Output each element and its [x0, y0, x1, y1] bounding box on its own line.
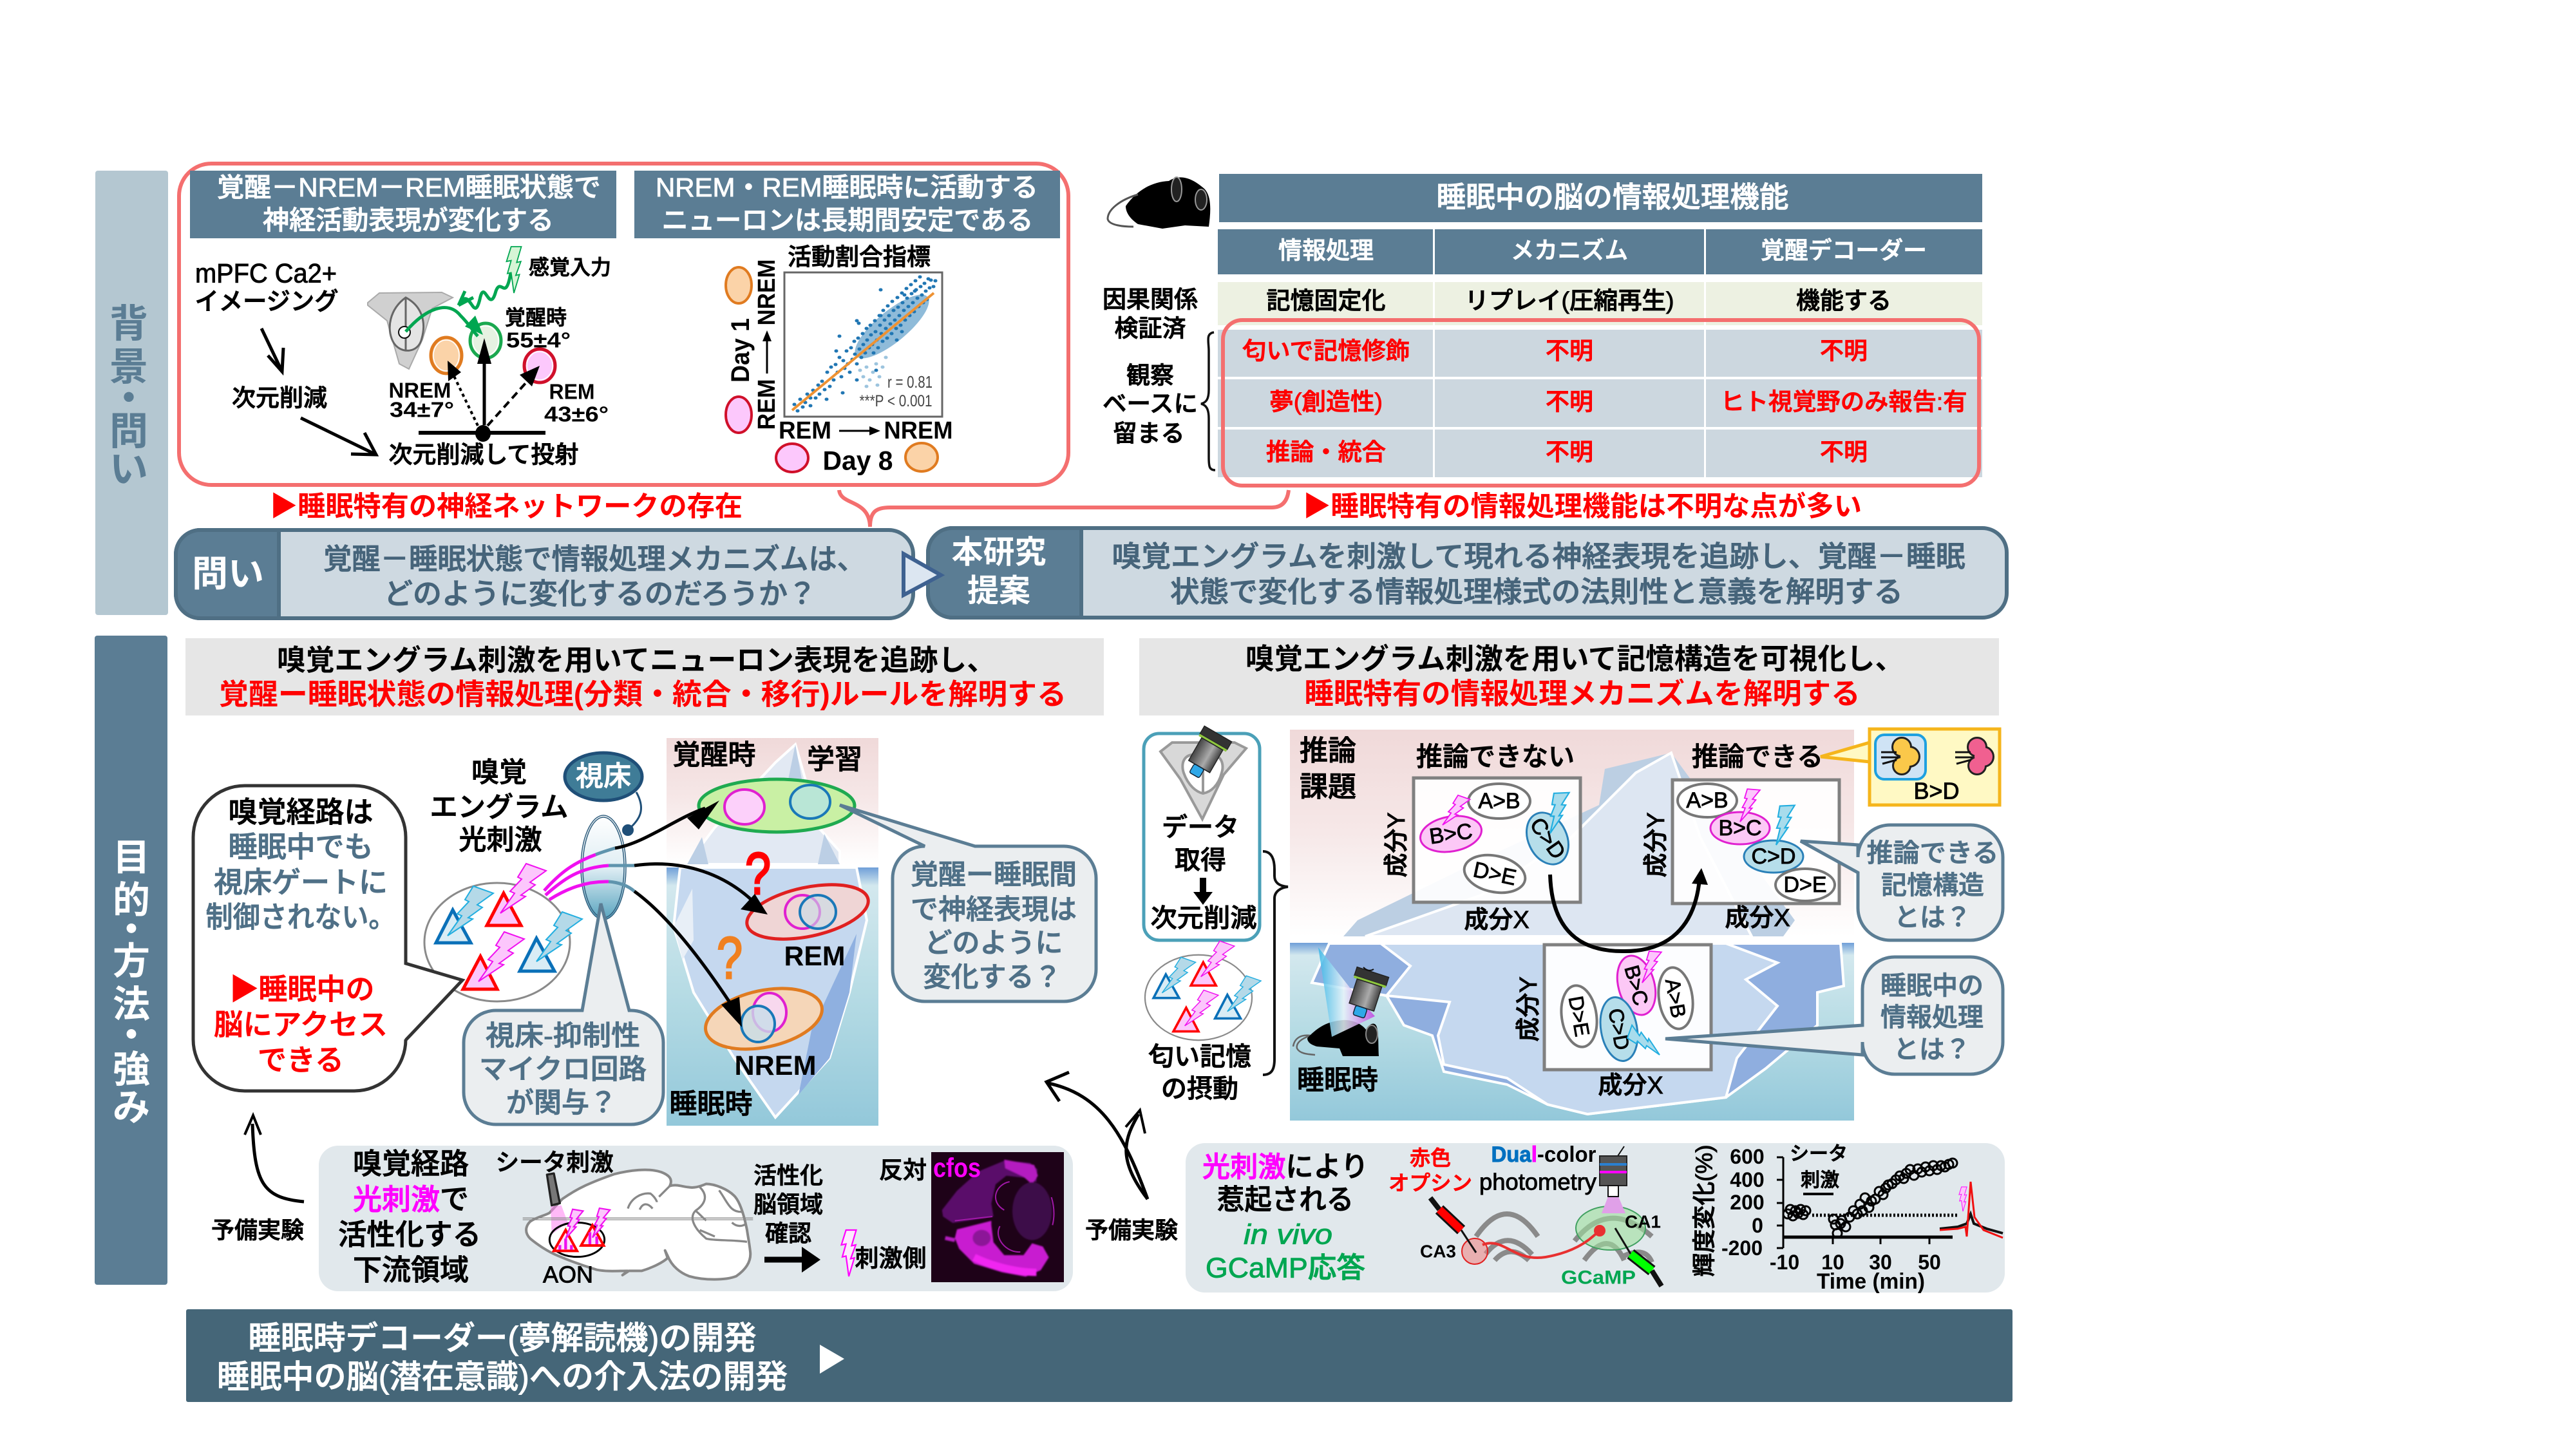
callout: olfactory path not gated: ▶睡眠中の: [229, 972, 375, 1006]
panel: section label purpose: ・: [113, 1015, 150, 1056]
panel: section label purpose: み: [113, 1087, 150, 1128]
table: sleep information processing: 覚醒デコーダー: [1761, 237, 1927, 264]
icon: thalamic gate lens: [581, 815, 626, 920]
icon: engram neurons: [424, 864, 582, 1001]
chart: brightness change over time: Time (min): [1817, 1269, 1925, 1294]
table: sleep information processing: 夢(創造性): [1269, 389, 1383, 415]
callout: olfactory path not gated: 脳にアクセス: [214, 1009, 388, 1041]
callout: sleep processing: 睡眠中の: [1880, 972, 1984, 1000]
arrow: pre-experiment to callout: [245, 1115, 304, 1202]
labels: state angles: NREM: [389, 379, 451, 402]
heading: state dependent representation: 神経活動表現が変化する: [263, 205, 554, 235]
table: sleep information processing: 不明: [1546, 389, 1593, 415]
table: sleep information processing: 機能する: [1796, 287, 1891, 314]
text block: imaging flow: [194, 258, 578, 468]
labels: iceberg states: [670, 740, 862, 1120]
text block: GCaMP response: [1202, 1151, 1368, 1284]
callout: olfactory path not gated: 睡眠中でも: [228, 831, 374, 863]
chart: memory map can infer: 成分Y: [1643, 812, 1670, 878]
chart: memory map cannot infer: A>B: [1478, 789, 1520, 813]
panel: question: 覚醒－睡眠状態で情報処理メカニズムは、: [323, 542, 866, 576]
chart: activity ratio index scatter: [784, 243, 942, 417]
callout: thalamic inhibitory microcircuit: [464, 904, 663, 1124]
chart: memory map cannot infer: B>C: [1428, 819, 1474, 849]
labels: state angles: 55±4°: [506, 328, 571, 352]
label: odor memory perturbation: 匂い記憶: [1148, 1043, 1251, 1071]
panel: proposal: [928, 528, 2007, 618]
chart: brightness change over time: 輝度変化(%): [1691, 1145, 1717, 1276]
labels: inference task: 推論: [1300, 735, 1356, 766]
labels: brain experiment: 反対: [879, 1157, 927, 1184]
icon: side view brain with fiber: [523, 1170, 753, 1280]
callout: representation change between states: で神経表現は: [911, 895, 1077, 925]
chart: brightness change over time: -10: [1770, 1251, 1799, 1274]
chart: brightness change over time: 600: [1730, 1145, 1765, 1168]
diagram: NREM cluster: [700, 979, 828, 1059]
callout: representation change between states: [840, 805, 1096, 1001]
heading: state dependent representation: 覚醒－NREM－REM睡眠状態で: [217, 173, 601, 202]
table: sleep information processing: [1218, 174, 1982, 477]
chart: memory map can infer: C>D: [1752, 844, 1795, 869]
arrow: sleep replay curved: [1550, 868, 1708, 951]
text block: downstream areas: 活性化する: [338, 1218, 481, 1251]
diagram: dual color photometry: [1388, 1142, 1662, 1288]
table: sleep information processing: 不明: [1546, 439, 1593, 465]
chart: memory map during sleep: 成分X: [1598, 1072, 1663, 1099]
callout: sleep processing: とは？: [1893, 1036, 1971, 1064]
panel: section label background: ・: [109, 377, 148, 420]
labels: state angles: [389, 256, 611, 426]
icon: yellow odor key: [1821, 729, 2000, 805]
labels: iceberg states: 睡眠時: [670, 1089, 752, 1120]
axis: day 8: [776, 417, 953, 475]
axis: day 8: REM: [779, 417, 831, 444]
panel: section label purpose: 法: [113, 984, 150, 1025]
label: sleeping: 睡眠時: [1297, 1065, 1378, 1095]
icon: odor memory neurons: [1145, 941, 1261, 1040]
callout: memory structure: とは？: [1894, 904, 1971, 932]
icon: mouse: [1108, 177, 1210, 229]
label: preliminary experiment left: 予備実験: [211, 1217, 304, 1243]
heading: stable neurons: NREM・REM睡眠時に活動する: [656, 173, 1038, 202]
labels: brain experiment: 確認: [765, 1220, 811, 1247]
label: odor memory perturbation: [1148, 1043, 1251, 1103]
panel: question: [176, 530, 913, 618]
chart: memory map can infer: [1643, 780, 1839, 932]
chart: memory map during sleep: B>C: [1620, 963, 1653, 1008]
text block: optical stimulation: エングラム: [430, 792, 568, 823]
bracket: link findings to question: [839, 490, 1289, 527]
callout: sleep processing: 情報処理: [1880, 1003, 1984, 1032]
icon: mouse brain top view: [368, 292, 453, 369]
labels: brain experiment: AON: [543, 1261, 593, 1288]
panel: neural representation findings: [179, 164, 1068, 485]
panel: right iceberg sleep bottom: [1290, 943, 1854, 1121]
callout: thalamic inhibitory microcircuit: マイクロ回路: [479, 1054, 647, 1085]
diagram: dual color photometry: photometry: [1479, 1168, 1596, 1195]
table: sleep information processing: ヒト視覚野のみ報告:有: [1721, 389, 1967, 415]
panel: proposal: 状態で変化する情報処理様式の法則性と意義を解明する: [1170, 576, 1903, 608]
banner: future development: 睡眠時デコーダー(夢解読機)の開発: [249, 1320, 756, 1356]
chart: brightness change over time: 30: [1869, 1251, 1892, 1274]
chart: memory map cannot infer: 成分X: [1464, 907, 1530, 934]
panel: question: どのように変化するのだろうか？: [384, 577, 817, 611]
labels: iceberg states: 覚醒時: [672, 740, 756, 771]
labels: state angles: 34±7°: [390, 398, 454, 421]
chart: activity ratio index scatter: r = 0.81: [887, 372, 933, 392]
callout: thalamic inhibitory microcircuit: 視床-抑制性: [486, 1021, 640, 1052]
chart: memory map during sleep: A>B: [1661, 977, 1690, 1019]
chart: brightness change over time: 50: [1918, 1251, 1941, 1274]
icon: stimulation bolt: [841, 1230, 857, 1276]
heading: left aim: 嗅覚エングラム刺激を用いてニューロン表現を追跡し、: [277, 644, 996, 676]
row labels: verified and observed: [1103, 286, 1215, 470]
table: sleep information processing: 推論・統合: [1266, 439, 1386, 465]
chart: activity ratio index scatter: 活動割合指標: [788, 243, 931, 270]
table: sleep information processing: 不明: [1546, 337, 1593, 365]
labels: inference task: 推論できる: [1692, 742, 1823, 772]
heading: right aim: [1139, 638, 1999, 715]
panel: section label purpose: 目: [113, 837, 150, 878]
table: sleep information processing: リプレイ(圧縮再生): [1464, 287, 1674, 314]
panel: section label purpose: 的: [113, 880, 150, 921]
chart: memory map can infer: A>B: [1686, 788, 1728, 813]
panel: proposal: 本研究: [951, 535, 1046, 570]
arrows: projections through thalamus: [544, 800, 768, 1027]
panel: section label purpose: [95, 636, 167, 1285]
chart: memory map cannot infer: 成分Y: [1383, 812, 1410, 878]
labels: brain experiment: 刺激側: [855, 1245, 926, 1271]
axis: day 1: REM: [753, 379, 781, 430]
heading: stable neurons: ニューロンは長期間安定である: [662, 205, 1033, 235]
callout: thalamic inhibitory microcircuit: が関与？: [506, 1088, 617, 1119]
axis: day 1: [726, 259, 781, 433]
axis: day 8: Day 8: [823, 446, 893, 475]
labels: iceberg states: REM: [784, 941, 845, 972]
image: cfos brain section: [931, 1152, 1064, 1282]
labels: brain experiment: 活性化: [753, 1162, 823, 1189]
text block: imaging flow: 次元削減: [232, 385, 327, 411]
icon: thalamus badge: [565, 753, 642, 836]
callout: olfactory path not gated: 視床ゲートに: [214, 866, 388, 899]
chart: memory map can infer: B>C: [1718, 816, 1762, 840]
icon: question marks: ?: [745, 841, 771, 907]
labels: inference task: 推論できない: [1416, 742, 1575, 772]
panel: section label background: 問: [109, 410, 148, 453]
chart: brightness change over time: 200: [1730, 1191, 1765, 1214]
chart: memory map can infer: 成分X: [1725, 905, 1790, 932]
row labels: verified and observed: 留まる: [1113, 420, 1185, 447]
text block: GCaMP response: in vivo: [1244, 1218, 1332, 1251]
chart: memory map during sleep: D>E: [1564, 994, 1594, 1038]
chart: memory map during sleep: C>D: [1604, 1007, 1634, 1052]
labels: brain experiment: [496, 1149, 927, 1288]
text block: optical stimulation: 嗅覚: [471, 757, 527, 788]
label: odor memory perturbation: の摂動: [1161, 1075, 1238, 1103]
text block: downstream areas: 光刺激で: [353, 1182, 469, 1216]
callout: olfactory path not gated: 嗅覚経路は: [228, 796, 374, 828]
callout: olfactory path not gated: できる: [258, 1043, 344, 1077]
text block: GCaMP response: GCaMP応答: [1206, 1252, 1365, 1284]
callout: sleep specific network: ▶睡眠特有の神経ネットワークの存在: [270, 491, 743, 522]
text block: downstream areas: 嗅覚経路: [353, 1148, 469, 1180]
text block: GCaMP response: 光刺激により: [1202, 1151, 1368, 1182]
panel: section label purpose: 方: [113, 940, 150, 983]
icon: thalamus badge: 視床: [576, 761, 631, 792]
labels: state angles: REM: [549, 380, 595, 403]
heading: left aim: 覚醒ー睡眠状態の情報処理(分類・統合・移行)ルールを解明する: [219, 677, 1066, 711]
chart: memory map during sleep: [1515, 945, 1711, 1099]
row labels: verified and observed: 検証済: [1114, 316, 1186, 341]
labels: state angles: 感覚入力: [529, 256, 611, 279]
heading: stable neurons: [634, 171, 1060, 238]
labels: state angles: 覚醒時: [505, 306, 567, 329]
labels: inference task: 課題: [1300, 772, 1356, 802]
labels: iceberg states: 学習: [807, 744, 862, 775]
text block: imaging flow: mPFC Ca2+: [195, 258, 337, 289]
callout: olfactory path not gated: 制御されない。: [206, 900, 395, 934]
diagram: dual color photometry: CA1: [1625, 1212, 1661, 1231]
chart: brightness change over time: シータ: [1790, 1144, 1848, 1164]
table: sleep information processing: 匂いで記憶修飾: [1242, 337, 1410, 365]
callout: representation change between states: 覚醒ー睡眠間: [911, 860, 1077, 891]
chart: memory map cannot infer: C>D: [1525, 813, 1570, 864]
panel: data acquisition: データ: [1162, 813, 1239, 842]
banner: future development: [186, 1309, 2012, 1402]
diagram: dual color photometry: GCaMP: [1561, 1267, 1636, 1288]
icon: yellow odor key: B>D: [1913, 778, 1960, 804]
image: cfos brain section: cfos: [933, 1153, 981, 1182]
labels: inference task: [1300, 735, 1823, 802]
panel: iceberg wake-sleep representation: [667, 738, 878, 1126]
text block: optical stimulation: [430, 757, 568, 856]
callout: memory structure: 記憶構造: [1881, 871, 1984, 900]
bracket: methods: [1263, 851, 1288, 1075]
icon: question marks: ?: [717, 925, 743, 991]
diagram: state angle vectors: [406, 247, 555, 442]
callout: memory structure: 推論できる: [1866, 839, 1999, 867]
callout: olfactory path not gated: [193, 786, 462, 1091]
text block: optical stimulation: 光刺激: [459, 825, 542, 856]
diagram: REM cluster: [742, 875, 873, 949]
heading: left aim: [185, 638, 1104, 715]
table: sleep information processing: メカニズム: [1511, 237, 1628, 264]
heading: right aim: 睡眠特有の情報処理メカニズムを解明する: [1305, 677, 1860, 710]
axis: day 1: Day 1: [726, 318, 755, 383]
arrow: to cfos result: [764, 1247, 820, 1273]
panel: right iceberg task top: [1290, 730, 1854, 936]
chart: memory map cannot infer: D>E: [1471, 857, 1519, 891]
diagram: dual color photometry: 赤色: [1410, 1146, 1451, 1170]
panel: data acquisition: [1144, 726, 1260, 940]
diagram: dual color photometry: Dual-color: [1492, 1142, 1596, 1167]
table: sleep information processing: 不明: [1820, 439, 1868, 465]
chart: activity ratio index scatter: ***P < 0.001: [859, 392, 933, 410]
diagram: dual color photometry: オプシン: [1388, 1171, 1472, 1195]
panel: downstream activation experiment: [319, 1146, 1073, 1291]
labels: iceberg states: NREM: [734, 1050, 817, 1081]
heading: state dependent representation: [190, 171, 616, 238]
arrow: question to proposal: [904, 554, 941, 595]
panel: section label background: い: [109, 448, 148, 491]
axis: day 8: NREM: [884, 417, 953, 444]
callout: sleep processing: [1665, 957, 2003, 1074]
panel: proposal: 提案: [967, 574, 1030, 609]
panel: section label purpose: 強: [113, 1048, 150, 1091]
chart: memory map cannot infer: [1383, 778, 1580, 934]
labels: brain experiment: シータ刺激: [496, 1149, 613, 1176]
panel: section label background: 背: [109, 303, 148, 345]
text block: imaging flow: 次元削減して投射: [389, 442, 578, 468]
chart: brightness change over time: -200: [1721, 1236, 1763, 1260]
callout: representation change between states: 変化する？: [923, 962, 1061, 993]
table: sleep information processing: 不明: [1820, 337, 1868, 365]
arrows: pre-experiments to aims: [1046, 1072, 1148, 1199]
text block: imaging flow: イメージング: [194, 289, 339, 316]
icon: question marks: [717, 841, 771, 991]
callout: red frame over unknown cells: [1223, 320, 1979, 486]
panel: data acquisition: 取得: [1175, 846, 1226, 875]
chart: brightness change over time: 刺激: [1801, 1170, 1839, 1191]
callout: representation change between states: どのように: [925, 928, 1063, 959]
row labels: verified and observed: 因果関係: [1103, 286, 1198, 313]
callout: sleep function unknown: ▶睡眠特有の情報処理機能は不明な点が多い: [1303, 491, 1862, 522]
panel: GCaMP response experiment: [1186, 1143, 2005, 1293]
panel: proposal: 嗅覚エングラムを刺激して現れる神経表現を追跡し、覚醒－睡眠: [1112, 540, 1965, 573]
heading: right aim: 嗅覚エングラム刺激を用いて記憶構造を可視化し、: [1245, 643, 1904, 675]
label: preliminary experiment right: 予備実験: [1085, 1217, 1178, 1243]
panel: section label background: 景: [109, 345, 148, 389]
chart: brightness change over time: 400: [1730, 1168, 1765, 1191]
table: sleep information processing: 情報処理: [1278, 237, 1374, 264]
chart: memory map during sleep: 成分Y: [1515, 976, 1542, 1042]
axis: day 1: NREM: [753, 259, 781, 326]
diagram: wake cluster: [699, 779, 855, 832]
diagram: dual color photometry: CA3: [1420, 1242, 1456, 1261]
panel: section label purpose: ・: [113, 909, 150, 951]
chart: memory map can infer: D>E: [1783, 873, 1827, 897]
row labels: verified and observed: 観察: [1126, 362, 1174, 389]
banner: future development: 睡眠中の脳(潜在意識)への介入法の開発: [217, 1359, 788, 1395]
callout: memory structure: [1801, 825, 2003, 940]
text block: GCaMP response: 惹起される: [1217, 1184, 1354, 1216]
labels: brain experiment: 脳領域: [753, 1191, 823, 1217]
table: sleep information processing: 記憶固定化: [1266, 287, 1386, 314]
panel: data acquisition: 次元削減: [1150, 904, 1257, 933]
labels: state angles: 43±6°: [544, 402, 609, 426]
text block: downstream areas: [338, 1148, 481, 1287]
chart: brightness change over time: 0: [1752, 1214, 1763, 1237]
panel: question: 問い: [192, 554, 264, 594]
row labels: verified and observed: ベースに: [1103, 390, 1198, 417]
chart: brightness change over time: [1691, 1144, 2003, 1294]
icon: sleeping mouse with microscope: [1293, 947, 1389, 1056]
panel: section label background: [95, 171, 168, 615]
table: sleep information processing: 睡眠中の脳の情報処理機能: [1436, 180, 1789, 214]
text block: downstream areas: 下流領域: [353, 1253, 469, 1287]
chart: brightness change over time: 10: [1821, 1251, 1844, 1274]
